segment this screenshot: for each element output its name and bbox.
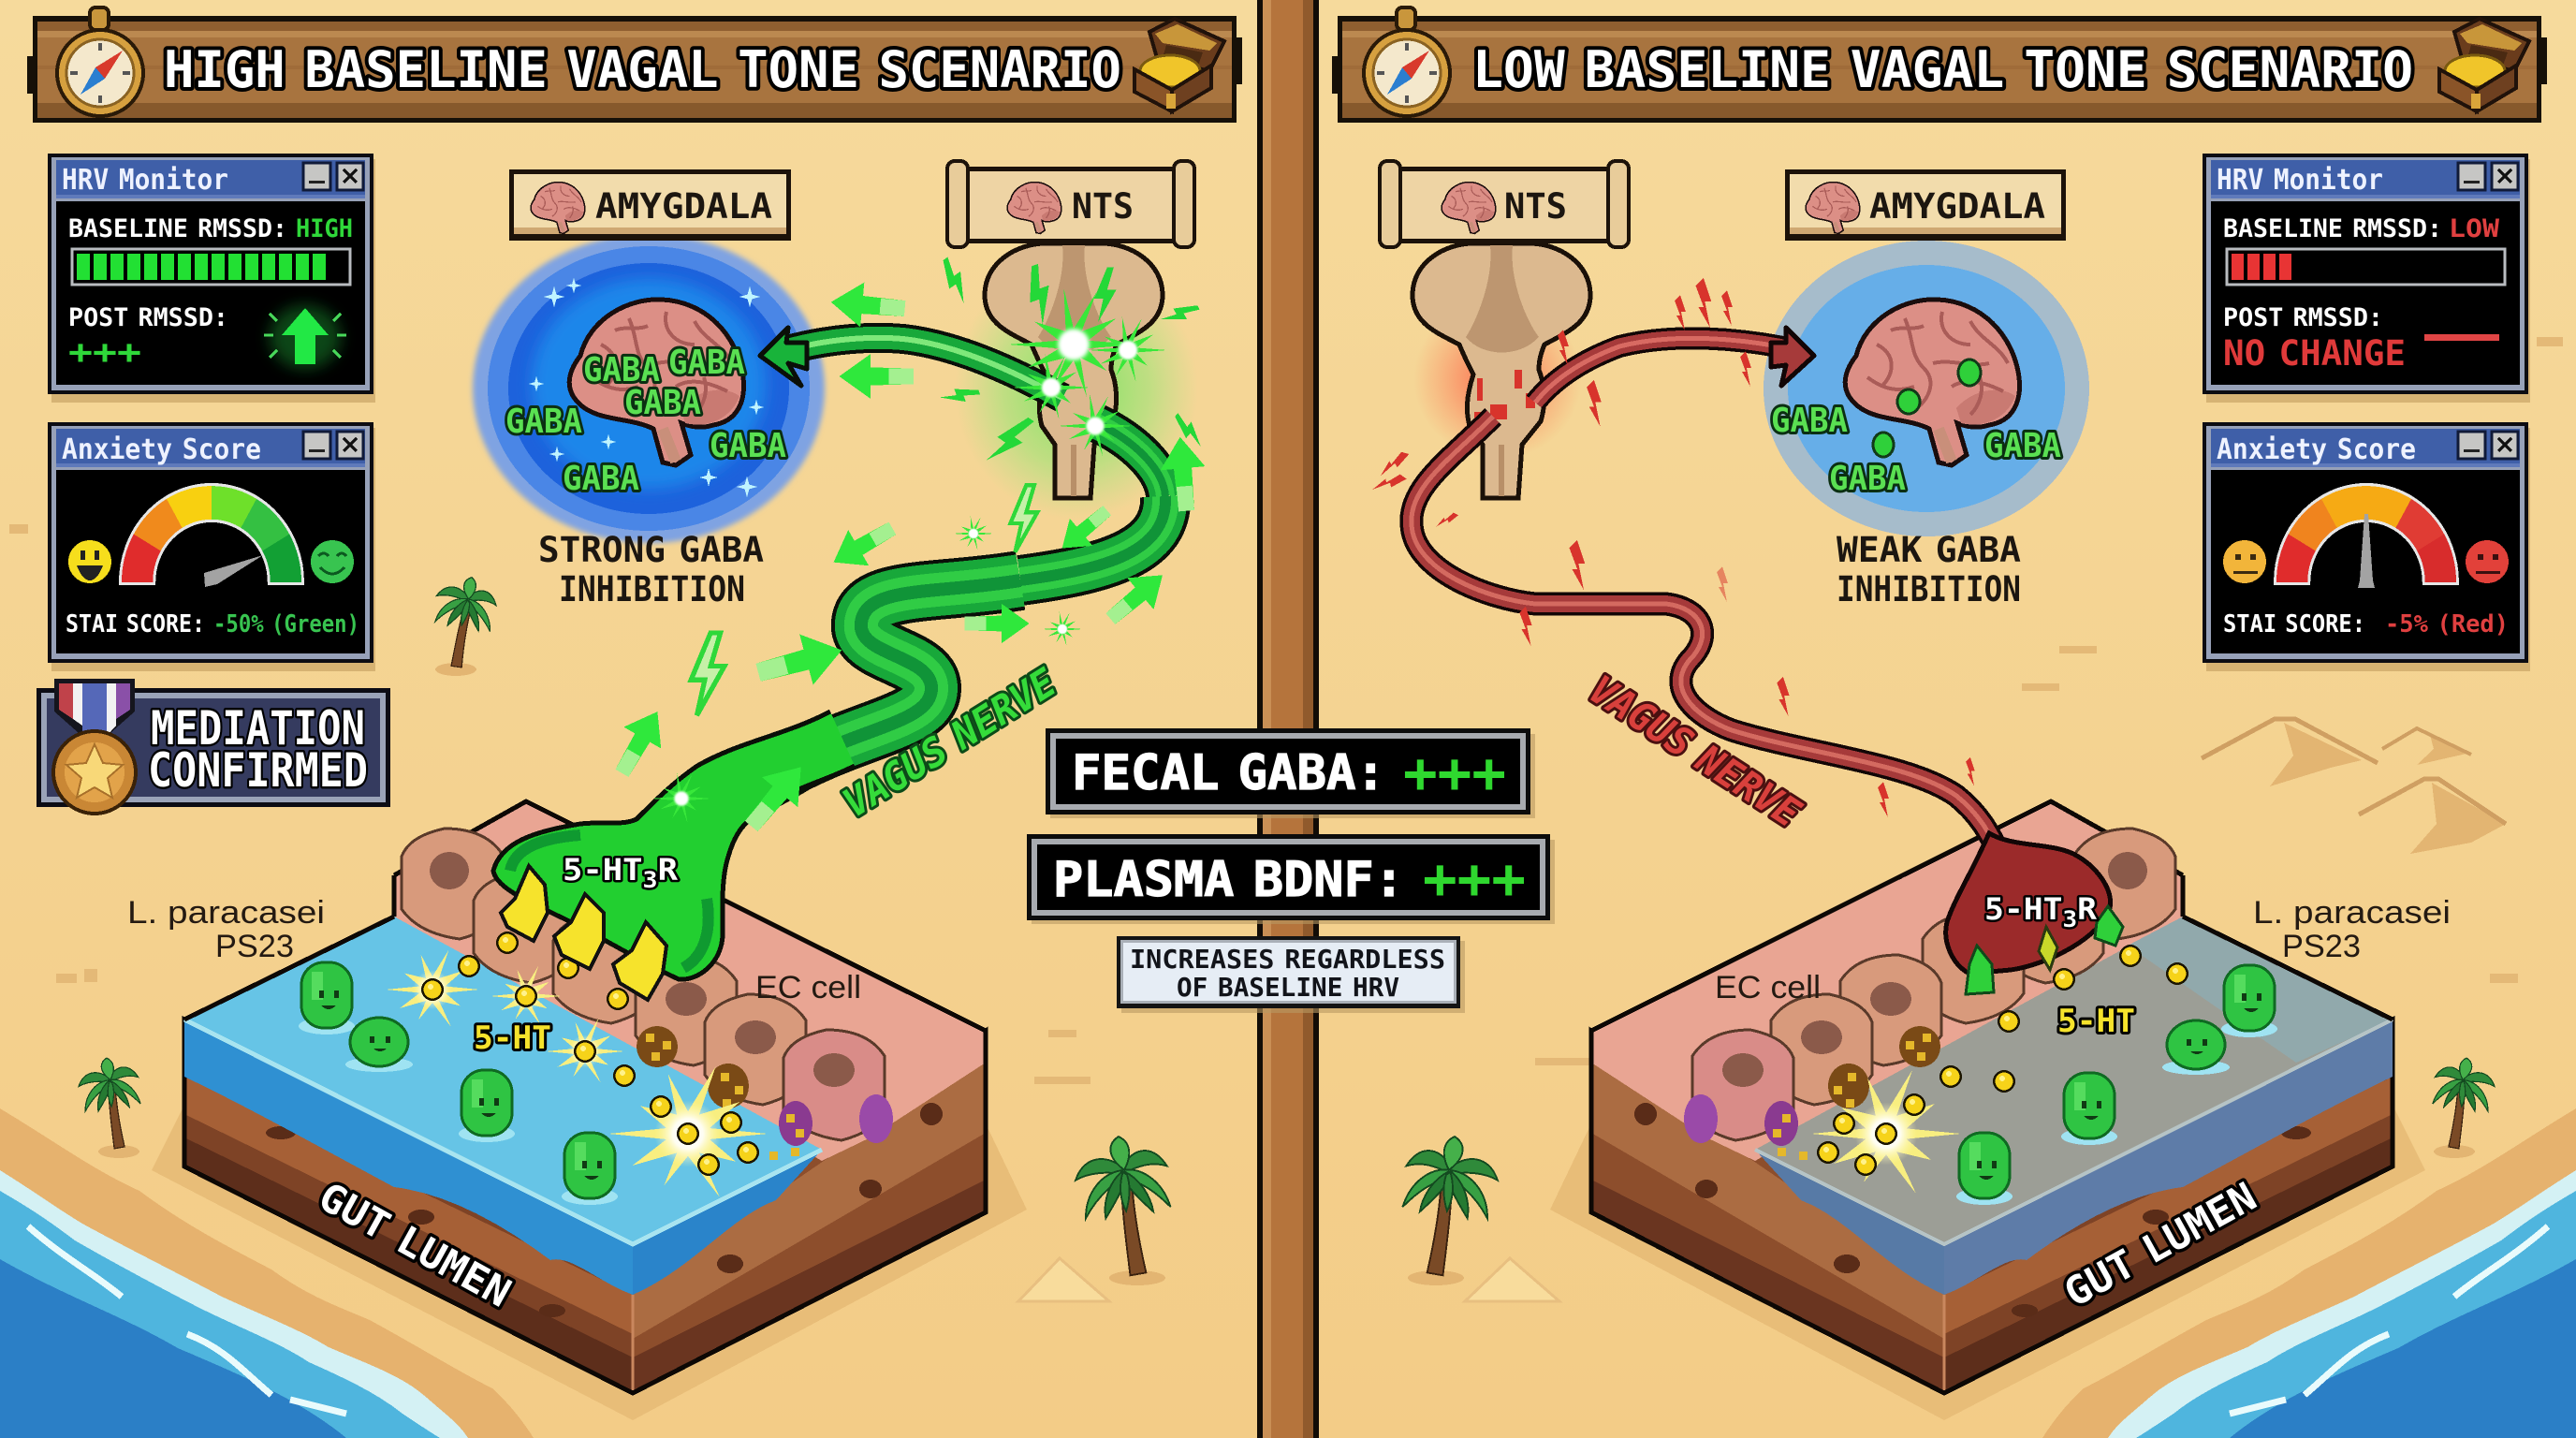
GABA labels high: GABA	[563, 460, 639, 498]
caption: weak GABA inhibition: WEAK GABA	[1837, 530, 2021, 570]
soil right	[1591, 1020, 2393, 1393]
5-HT3R nerve terminal high	[493, 712, 855, 1000]
GABA labels low: GABA	[1829, 460, 1906, 498]
small labels right: EC cell	[1715, 970, 1821, 1005]
right gut block	[1550, 801, 2425, 1420]
GABA labels low: GABA	[1771, 402, 1848, 440]
hrv bar low	[2227, 249, 2505, 285]
vagus nerve high	[655, 328, 1165, 838]
label: NTS scroll low: NTS	[1504, 186, 1567, 227]
panel: HRV monitor high	[48, 154, 375, 403]
panel: anxiety score low: -5% (Red)	[2385, 610, 2509, 638]
label 5-HT3R low: 5-HT	[1984, 891, 2056, 927]
receptors yellow	[501, 866, 666, 1000]
left gut block	[152, 801, 1027, 1420]
panel: HRV monitor low: POST RMSSD:	[2223, 303, 2383, 332]
label: NTS scroll high: NTS	[1072, 186, 1134, 227]
panel: HRV monitor low: BASELINE RMSSD:	[2223, 214, 2442, 243]
5-HT label right: 5-HT	[2057, 1003, 2135, 1040]
flat dash indicator	[2424, 334, 2499, 341]
green energy glow behind NTS	[955, 257, 1198, 520]
label 5-HT3R high: R	[658, 852, 679, 888]
5-HT dots right	[1817, 945, 2188, 1176]
icon: calm green face	[311, 540, 354, 583]
palm trees	[75, 573, 2498, 1285]
panel: HRV monitor high: POST RMSSD:	[68, 303, 228, 332]
panel: HRV monitor high: BASELINE RMSSD:	[68, 214, 287, 243]
label: amygdala low	[1785, 169, 2066, 241]
VAGUS NERVE label high: VAGUS NERVE	[835, 659, 1064, 827]
icon: compass right	[1364, 7, 1450, 116]
panel: anxiety score low: STAI SCORE:	[2223, 610, 2365, 638]
panel: anxiety score low	[2203, 422, 2530, 671]
sign: plasma BDNF: PLASMA BDNF:	[1053, 852, 1404, 908]
caption: strong GABA inhibition	[538, 530, 764, 609]
icon: compass	[57, 7, 143, 116]
panel: anxiety score low: Anxiety Score	[2217, 433, 2416, 466]
5-HT dots	[421, 932, 759, 1176]
nerve arrowhead low	[1771, 328, 1814, 386]
shoreline right	[2042, 1108, 2576, 1438]
icon: unhappy red face	[2466, 540, 2509, 583]
caption: strong GABA inhibition: STRONG GABA	[538, 530, 764, 570]
NTS brainstem high	[985, 243, 1163, 498]
panel: anxiety score high	[48, 422, 375, 671]
damaged receptor yellow	[2039, 927, 2057, 970]
icon: treasure chest right	[2439, 19, 2529, 111]
receptors green	[1966, 906, 2123, 994]
label: amygdala high: AMYGDALA	[595, 186, 772, 227]
label: amygdala high	[509, 169, 791, 241]
GABA labels high: GABA	[624, 384, 701, 422]
tissue top	[394, 801, 986, 1212]
title right: LOW BASELINE VAGAL TONE SCENARIO	[1472, 40, 2413, 99]
caption: strong GABA inhibition: INHIBITION	[559, 569, 745, 609]
icon: up arrow	[264, 305, 346, 369]
GABA labels high	[505, 344, 786, 498]
NTS brainstem low	[1412, 243, 1590, 498]
title: HIGH BASELINE VAGAL TONE SCENARIO	[164, 40, 1121, 99]
sparkles	[529, 278, 764, 497]
hrv bar high	[72, 249, 350, 285]
caption: weak GABA inhibition	[1837, 530, 2021, 609]
shoreline left	[0, 1108, 534, 1438]
panel: anxiety score high: STAI SCORE:	[66, 610, 205, 638]
label 5-HT3R high: 5-HT	[563, 852, 635, 888]
GABA labels high: GABA	[583, 351, 660, 389]
bacteria	[299, 962, 618, 1205]
gauge needle high	[204, 555, 263, 587]
panel: HRV monitor high: HRV Monitor	[62, 164, 228, 197]
lumen water	[184, 917, 822, 1295]
epithelial cells right	[1684, 829, 2175, 1160]
label 5-HT3R low: R	[2077, 891, 2098, 927]
small labels left: EC cell	[755, 970, 861, 1005]
GABA labels low	[1771, 402, 2061, 498]
label: amygdala low: AMYGDALA	[1869, 186, 2045, 227]
brain high	[569, 300, 744, 465]
panel: HRV monitor low: HRV Monitor	[2217, 164, 2383, 197]
GUT LUMEN label left: GUT LUMEN	[312, 1173, 519, 1316]
gauge needle low	[2358, 514, 2375, 588]
sign: plasma BDNF	[1027, 834, 1555, 924]
energy effects high	[604, 256, 1209, 842]
red sparks	[1370, 278, 1975, 817]
GUT LUMEN label right: GUT LUMEN	[2056, 1173, 2263, 1316]
soil	[184, 1020, 986, 1393]
panel: HRV monitor high: HIGH	[296, 214, 353, 243]
badge: mediation confirmed: MEDIATION	[151, 701, 365, 756]
5-HT3R nerve terminal low	[1946, 833, 2123, 994]
vagus nerve low	[1412, 328, 1998, 852]
label 5-HT3R high: 3	[643, 867, 658, 893]
amygdala region high	[473, 234, 825, 543]
sign: increases regardless of baseline HRV: OF BASELINE HRV	[1177, 972, 1399, 1003]
sign: plasma BDNF: +++	[1423, 846, 1526, 912]
VAGUS NERVE label low: VAGUS NERVE	[1581, 667, 1809, 837]
panel: HRV monitor low: NO CHANGE	[2223, 333, 2406, 374]
icon: medal	[53, 679, 136, 814]
serotonin burst right	[1811, 1070, 1961, 1194]
small labels right: PS23	[2282, 929, 2361, 964]
GABA labels high: GABA	[668, 344, 745, 382]
GABA labels high: GABA	[710, 427, 786, 465]
red lesions on brainstem	[1474, 370, 1535, 419]
label: NTS scroll low	[1380, 161, 1629, 247]
sign: fecal GABA	[1046, 728, 1535, 818]
gauge high	[122, 486, 301, 582]
badge: mediation confirmed	[37, 679, 390, 814]
red glow around NTS	[1413, 300, 1582, 459]
high scenario banner	[27, 7, 1242, 123]
sign: fecal GABA: +++	[1403, 741, 1506, 806]
bacteria right	[1956, 965, 2277, 1205]
panel: HRV monitor low	[2203, 154, 2530, 403]
residual GABA spots	[1873, 360, 1981, 457]
small labels left: L. paracasei	[127, 895, 325, 931]
small labels left	[127, 895, 861, 1005]
label 5-HT3R low: 3	[2062, 906, 2077, 932]
serotonin release bursts	[386, 949, 768, 1197]
5-HT label left: 5-HT	[474, 1020, 551, 1057]
caption: weak GABA inhibition: INHIBITION	[1837, 569, 2021, 609]
small labels right	[1715, 895, 2451, 1005]
small labels right: L. paracasei	[2253, 895, 2451, 931]
tissue top right	[1591, 801, 2183, 1212]
lumen water, grey	[1755, 917, 2393, 1295]
sign: fecal GABA: FECAL GABA:	[1072, 745, 1385, 801]
low scenario banner	[1332, 7, 2547, 123]
central wooden post divider	[1257, 0, 1319, 1438]
icon: happy face	[68, 540, 111, 583]
sign: increases regardless of baseline HRV: INCREASES REGARDLESS	[1130, 944, 1445, 975]
brain low	[1845, 300, 2020, 465]
panel: HRV monitor low: LOW	[2449, 214, 2500, 243]
badge: mediation confirmed: CONFIRMED	[148, 743, 368, 798]
block shadow on sand right	[1550, 1105, 2425, 1420]
small labels left: PS23	[215, 929, 294, 964]
star on terminal	[651, 773, 711, 823]
icon: treasure chest	[1134, 19, 1224, 111]
panel: anxiety score high: Anxiety Score	[62, 433, 261, 466]
sand dunes	[9, 337, 2563, 1301]
GABA labels high: GABA	[505, 403, 582, 441]
nerve arrowhead high	[760, 328, 807, 386]
GABA labels low: GABA	[1984, 427, 2061, 465]
sign: increases regardless of baseline HRV	[1117, 936, 1465, 1013]
icon: neutral face	[2223, 540, 2266, 583]
epithelial cells	[402, 829, 893, 1160]
block shadow on sand	[152, 1105, 1027, 1420]
panel: HRV monitor high: +++	[68, 333, 141, 372]
panel: anxiety score high: -50% (Green)	[213, 610, 359, 638]
label: NTS scroll high	[947, 161, 1194, 247]
amygdala region low	[1764, 241, 2089, 536]
gauge low	[2276, 486, 2456, 582]
